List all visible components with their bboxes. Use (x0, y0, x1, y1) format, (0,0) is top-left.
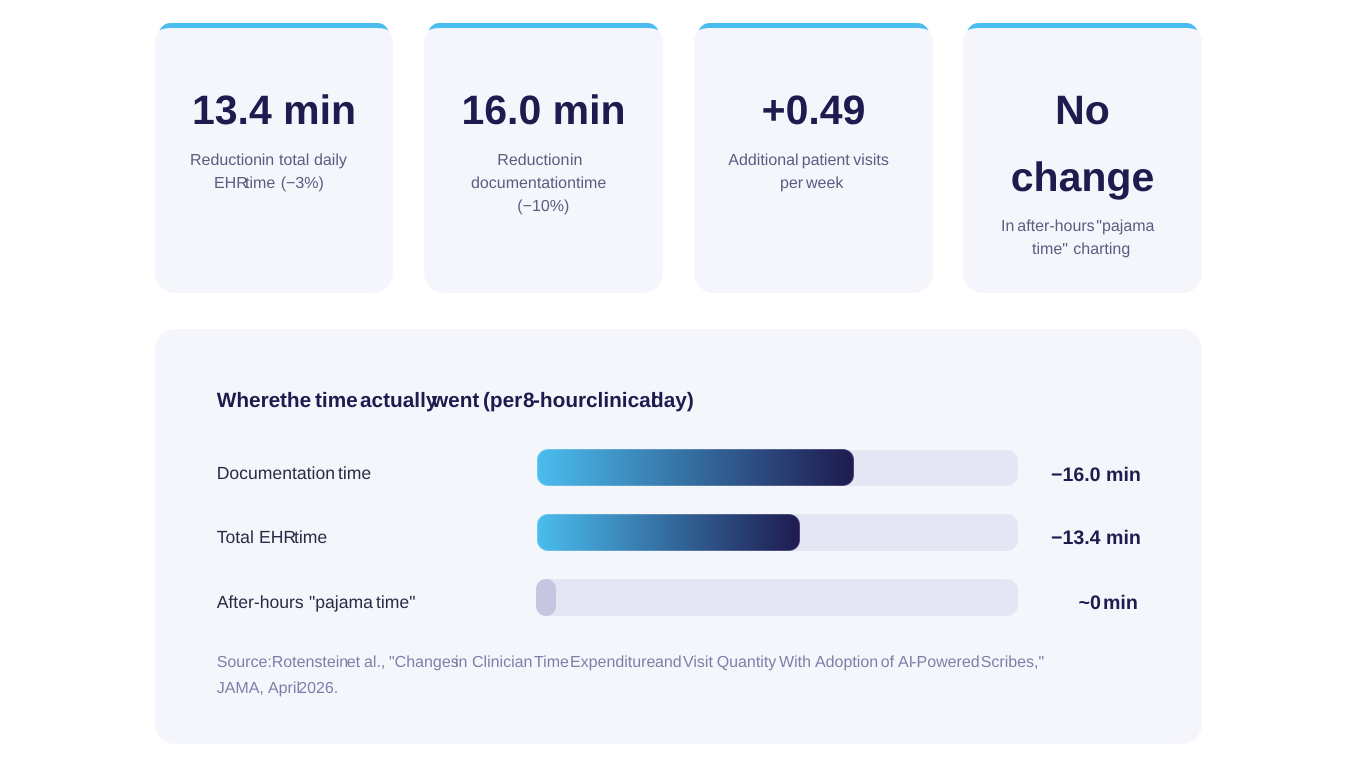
source note: Scribes," (981, 654, 1044, 670)
stat description: time" (1032, 241, 1068, 258)
bar track: total EHR (537, 514, 1018, 551)
bar track: documentation (537, 450, 1018, 486)
heading: actually (360, 389, 437, 412)
source note: Clinician (472, 654, 532, 670)
source note: of (881, 654, 894, 670)
stat description: Reduction (190, 152, 262, 169)
icon: card top accent (698, 23, 928, 30)
stat description: daily (314, 152, 347, 169)
source note: al., (364, 654, 385, 670)
source note: AI (898, 654, 913, 670)
panel: 16.0 min stat card (424, 23, 663, 293)
stat description: Additional (728, 152, 799, 169)
bar fill: documentation (537, 449, 854, 486)
stat value: 13.4 min (192, 87, 356, 133)
source note: et (347, 654, 360, 670)
row label: documentation time: Documentation (217, 463, 335, 483)
source note: 2026. (298, 680, 338, 696)
row label: total EHR time (217, 527, 327, 547)
panel: +0.49 stat card (694, 23, 933, 293)
source note: JAMA, (217, 680, 264, 696)
stat description: (−3%) (281, 175, 324, 192)
heading: time (315, 389, 358, 412)
stat value: +0.49 (762, 87, 865, 133)
heading: went (432, 389, 479, 412)
stat description: Reduction (497, 152, 569, 169)
stat description: total (279, 152, 309, 169)
heading (216, 389, 694, 412)
source note: -Powered (911, 654, 980, 670)
stat description: patient (802, 152, 850, 169)
heading: 8 (523, 389, 535, 412)
heading: day) (651, 389, 694, 412)
icon: card top accent (428, 23, 658, 30)
stat description: documentation (471, 175, 576, 192)
stat description (471, 152, 606, 215)
stat description: per (780, 175, 803, 192)
row label: total EHR time: time (294, 527, 327, 547)
source note: Source: (217, 654, 272, 670)
stat value: No change (1011, 87, 1154, 200)
stat description (1001, 218, 1154, 258)
source note: Visit (683, 654, 713, 670)
source note: April (268, 680, 300, 696)
source note: Rotenstein (272, 654, 348, 670)
stat description: time (245, 175, 275, 192)
panel: no change stat card (963, 23, 1202, 293)
stat description: week (806, 175, 843, 192)
row label: after-hours pajama time: time" (376, 592, 415, 612)
source note: Time (534, 654, 569, 670)
stat value: 16.0 min (461, 87, 626, 133)
row label: total EHR time: Total (217, 527, 254, 547)
stat description: EHR (214, 175, 248, 192)
heading: the (280, 389, 311, 412)
bar fill: after-hours (536, 579, 556, 616)
stat description: In (1001, 218, 1014, 235)
source note: in (455, 654, 467, 670)
stat description: in (570, 152, 582, 169)
heading: (per (483, 389, 522, 412)
value: after-hours: ~0 (1078, 592, 1101, 614)
row label: after-hours pajama time (216, 592, 415, 612)
icon: card top accent (160, 23, 388, 30)
source note (217, 654, 1044, 696)
value: after-hours (1078, 592, 1138, 614)
source note: Adoption (815, 654, 878, 670)
stat description: visits (853, 152, 889, 169)
panel: time breakdown (155, 329, 1202, 744)
source note: and (655, 654, 682, 670)
icon: card top accent (968, 23, 1198, 30)
bar fill: total EHR (537, 514, 800, 551)
stat description: in (262, 152, 274, 169)
stat description: (−10%) (517, 198, 569, 215)
source note: Expenditure (570, 654, 655, 670)
stat description: "pajama (1096, 218, 1154, 235)
source note: "Changes (389, 654, 459, 670)
value: total EHR: −13.4 min (1051, 527, 1141, 549)
heading: clinical (586, 389, 656, 412)
value: documentation: −16.0 min (1051, 464, 1141, 486)
stat description: after-hours (1017, 218, 1095, 235)
row label: after-hours pajama time: "pajama (309, 592, 373, 612)
stat description: time (576, 175, 606, 192)
heading: -hour (533, 389, 586, 412)
bar track: after-hours (537, 579, 1018, 616)
value: after-hours: min (1103, 592, 1138, 614)
stat description (728, 152, 889, 192)
row label: documentation time: time (338, 463, 371, 483)
row label: after-hours pajama time: After-hours (217, 592, 304, 612)
panel: 13.4 min stat card (155, 23, 393, 293)
stat description: charting (1073, 241, 1130, 258)
heading: Where (217, 389, 280, 412)
source note: With (779, 654, 811, 670)
stat description (190, 152, 347, 192)
row label: total EHR time: EHR (259, 527, 296, 547)
source note: Quantity (717, 654, 776, 670)
